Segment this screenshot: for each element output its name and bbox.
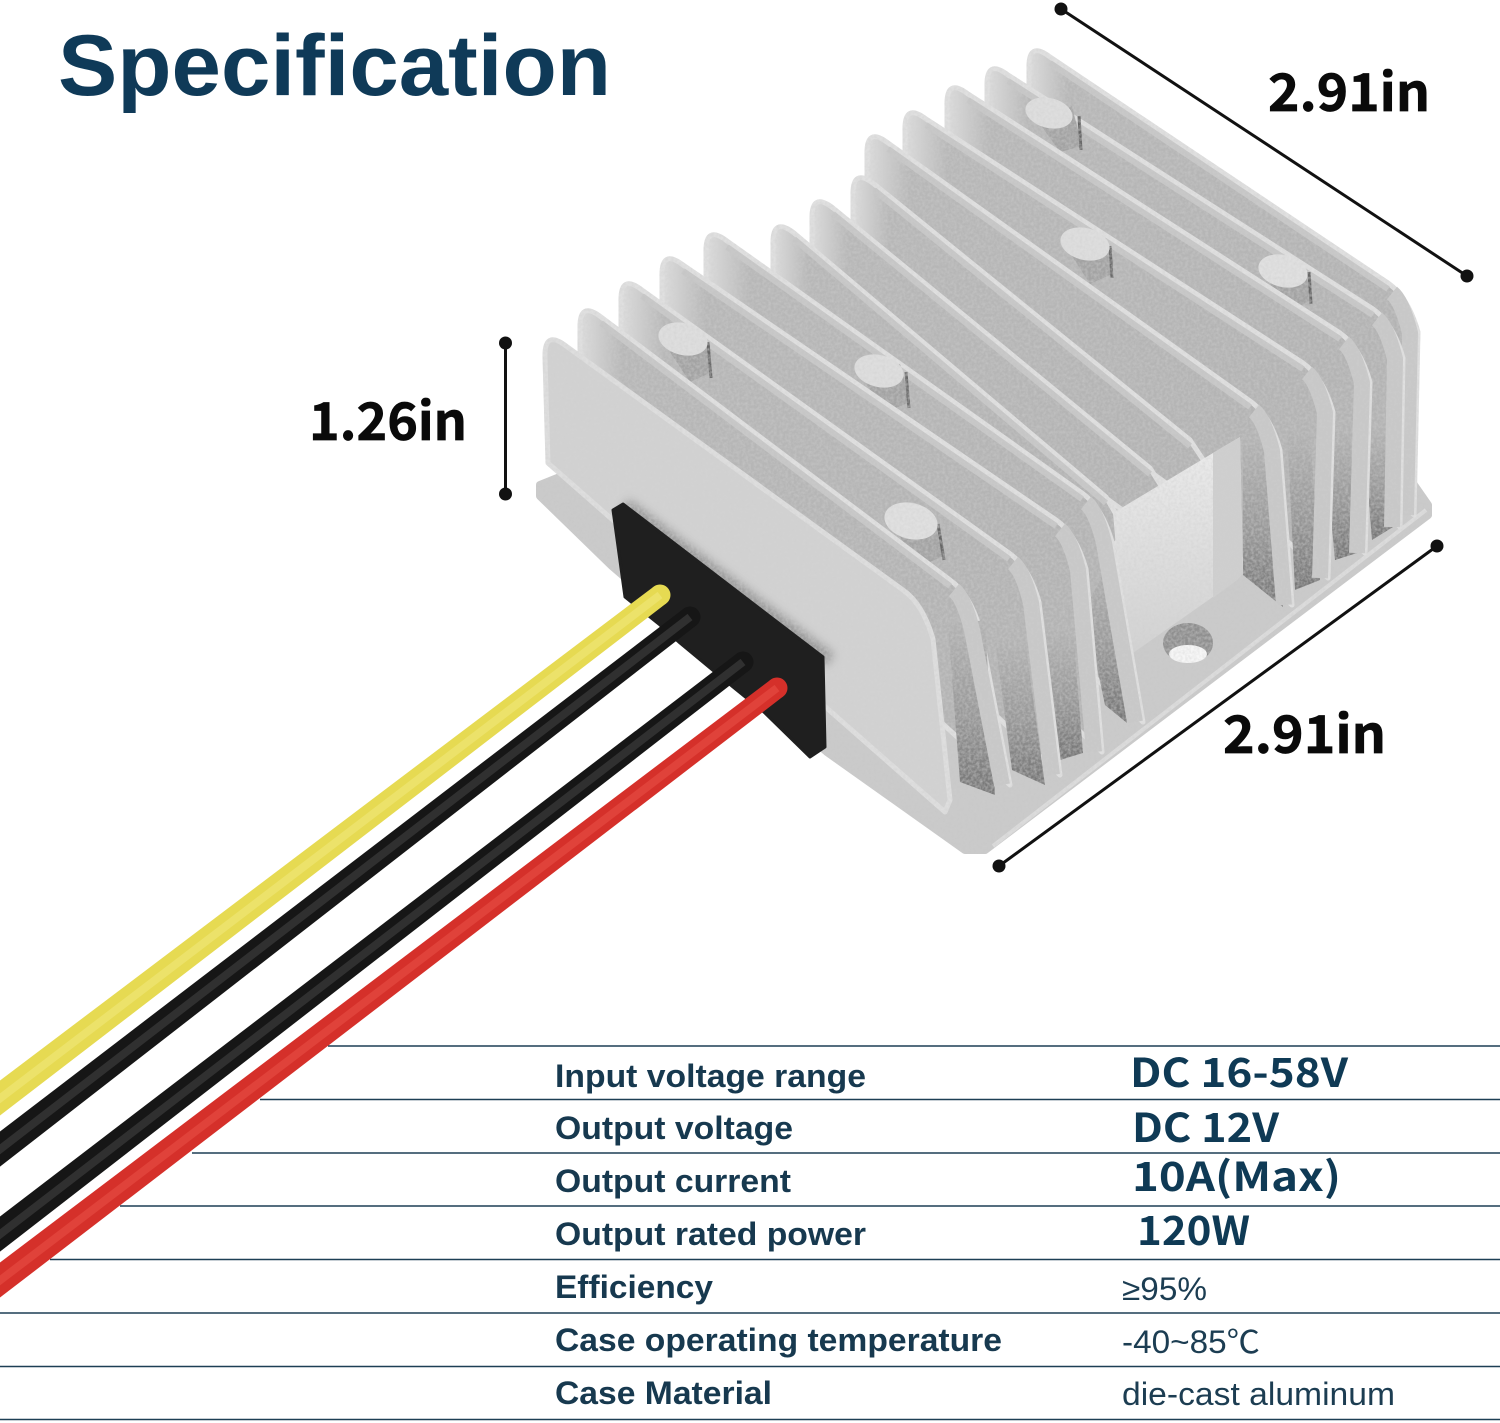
dimension label: height: 1.26in [309,380,467,455]
value: case material: die-cast aluminum [1122,1376,1395,1412]
front plate [545,340,950,812]
fin 8 [853,178,1210,500]
dimension label: top width: 2.91in [1268,51,1430,126]
dimension: lower length [992,540,1444,872]
fin 10 [905,113,1333,590]
label: input voltage range: Input voltage range [555,1058,866,1094]
label: output current: Output current [555,1163,791,1199]
label: output rated power: Output rated power [555,1216,866,1252]
value: output rated power: 120W [1137,1199,1250,1257]
value: output current: 10A(Max) [1132,1145,1341,1203]
label: case material: Case Material [555,1375,772,1411]
fin 6 [773,227,1125,560]
aluminium case [540,51,1428,850]
dimension: height [499,336,512,500]
mounting screw: front left [655,317,712,382]
value: efficiency: ≥95% [1122,1271,1207,1307]
spec table rules [0,1046,1500,1420]
wire: black upper [0,606,700,1168]
dimension label: lower length: 2.91in [1223,693,1386,768]
base flange [540,300,1428,850]
value: input voltage: DC 16-58V [1130,1041,1348,1099]
rubber connector grommet [613,504,825,757]
wire: red [0,678,788,1299]
fin 12 [987,69,1403,540]
dimension: top width [1054,2,1474,282]
wire: yellow [0,584,670,1117]
fin 5 [706,235,1143,723]
fin 7 [812,202,1170,530]
title: Specification [58,18,611,114]
central block [1113,437,1243,653]
wire: black lower [0,652,754,1253]
label: efficiency: Efficiency [555,1269,713,1305]
fin 3 [621,284,1060,785]
mounting screw: front right [880,497,944,566]
value: output voltage: DC 12V [1132,1096,1279,1154]
value: temperature: -40~85℃ [1122,1324,1260,1360]
fin 11 [947,88,1370,560]
fin 9 [867,137,1292,607]
specification table text [555,1041,1395,1412]
mounting screw: middle front [851,349,910,412]
mounting hole [1163,623,1213,663]
fin 13 [1029,51,1418,515]
mounting screw: middle rear [1057,222,1113,284]
label: output voltage: Output voltage [555,1110,793,1146]
mounting screw: rear top [1022,93,1082,152]
mounting screw: rear right [1255,249,1312,312]
label: case operating temperature: Case operating temperature [555,1322,1002,1358]
fin 2 [580,311,1010,795]
fin 4 [662,259,1102,760]
